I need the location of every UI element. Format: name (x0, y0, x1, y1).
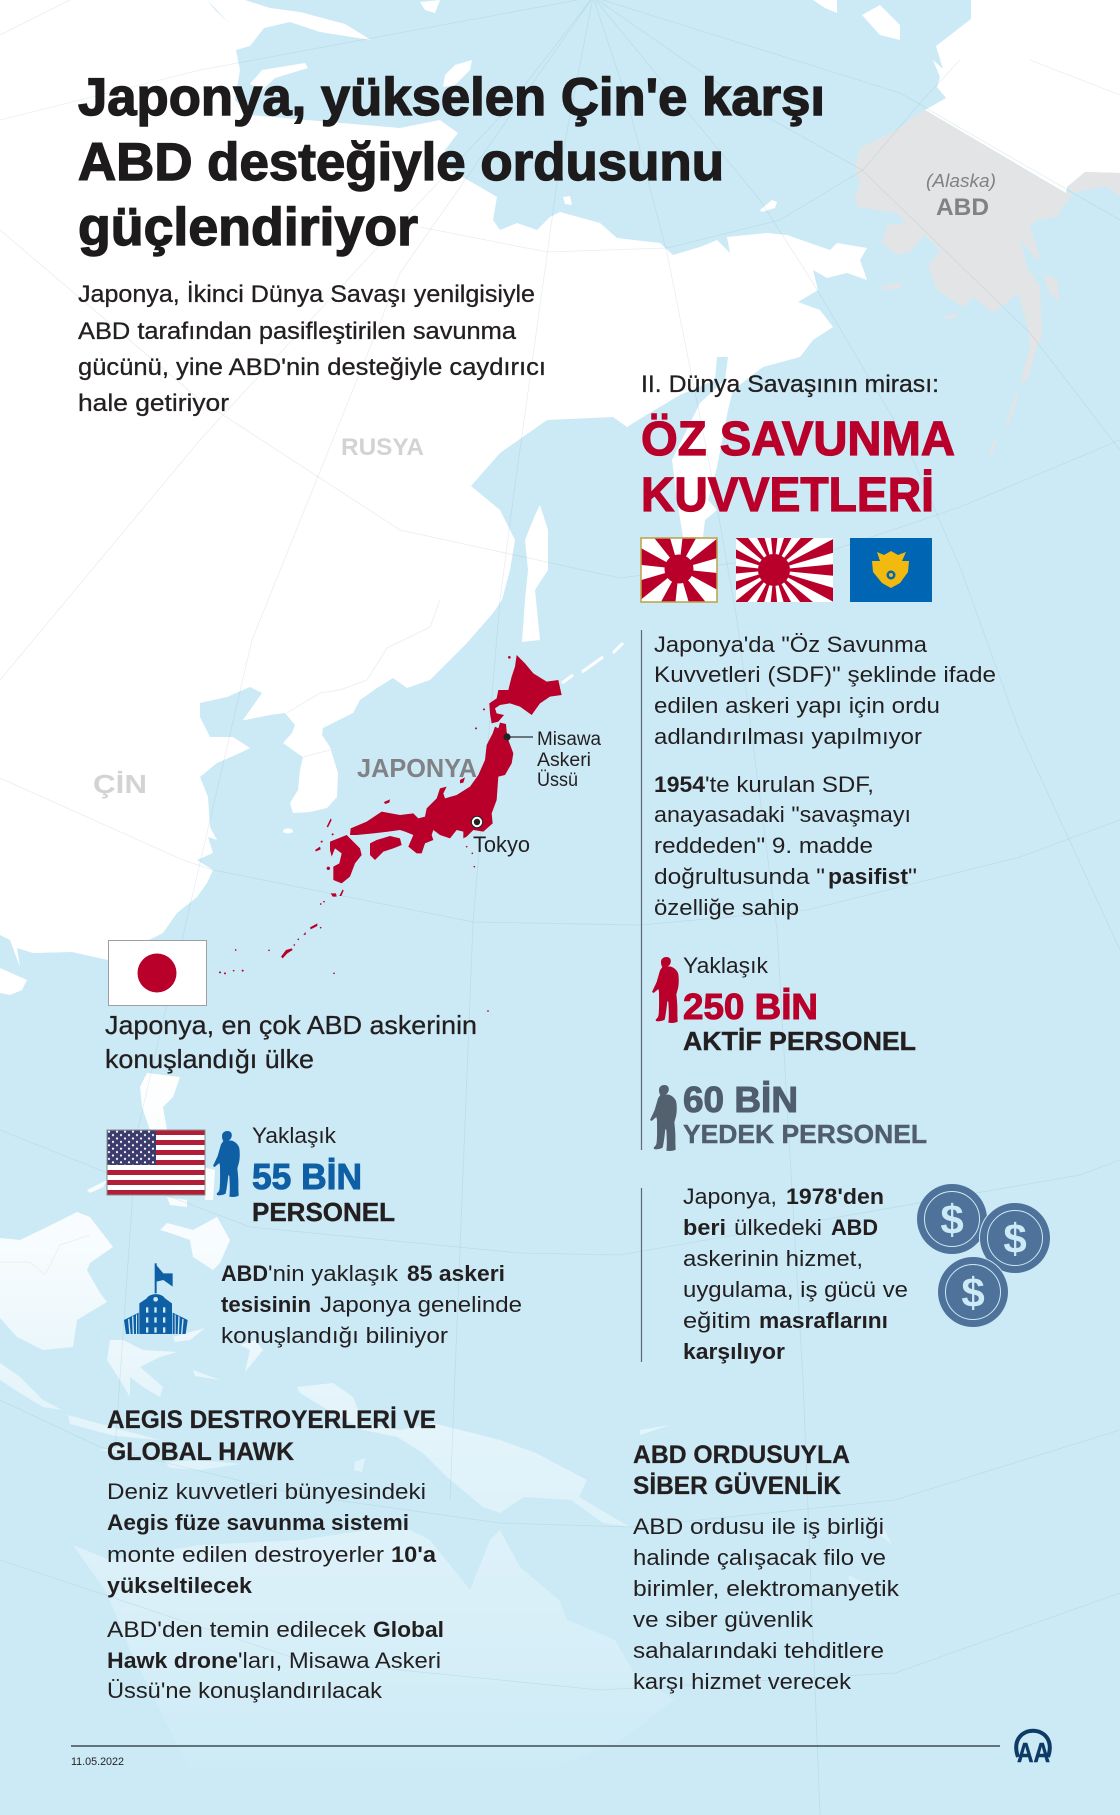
land: Sakhalin (522, 505, 548, 642)
land: Southeast Asia and Australia (0, 1073, 892, 1790)
text: SDF description: anayasadaki "savaşmayı (654, 802, 911, 827)
text: 85 bases (221, 1261, 522, 1348)
body text: Global (373, 1617, 444, 1642)
Shikoku (370, 836, 402, 860)
marker: Misawa (503, 729, 601, 791)
heading: Öz Savunma Kuvvetleri: ÖZ SAVUNMA (641, 413, 955, 466)
text: SDF description: 'te kurulan SDF, (705, 772, 874, 797)
marker: Tokyo (471, 816, 530, 857)
text: SDF description: Kuvvetleri (SDF)" şeklinde ifade (654, 662, 996, 687)
logo: AA (1016, 1731, 1050, 1768)
text: SDF description: reddeden" 9. madde (654, 833, 873, 858)
stat: 55 bin personel: PERSONEL (252, 1197, 395, 1227)
text: Japan pays costs: eğitim (683, 1308, 751, 1333)
footer rule (71, 1745, 1000, 1747)
text: Japan pays costs: 1978'den (786, 1184, 884, 1209)
land: Kurils and small islands (562, 643, 623, 683)
marker: Misawa: Misawa (537, 729, 601, 750)
flag: Japan (108, 940, 206, 1006)
stat: 55 bin personel (252, 1123, 395, 1227)
text: 85 bases: konuşlandığı biliniyor (221, 1323, 449, 1348)
body text: 10'a (391, 1542, 437, 1567)
land: Alaska (855, 110, 1120, 383)
map label: Alaska ABD (926, 171, 996, 221)
body text: karşı hizmet verecek (633, 1669, 852, 1694)
stat: 55 bin personel: 55 BİN (252, 1156, 362, 1197)
marker: Tokyo: Tokyo (473, 832, 530, 857)
text: Japan pays costs: beri (683, 1215, 726, 1240)
text: Japan pays costs: Japonya, (683, 1184, 777, 1209)
date: 11.05.2022 (71, 1756, 124, 1768)
section: Aegis and Global Hawk (107, 1406, 444, 1703)
text: Japan pays costs: ABD (831, 1215, 878, 1240)
text: Japan pays costs: ülkedeki (734, 1215, 822, 1240)
stat: 55 bin personel: Yaklaşık (252, 1123, 337, 1148)
heading (107, 1406, 436, 1466)
land: northern islands (250, 0, 900, 212)
body text: ve siber güvenlik (633, 1607, 814, 1632)
land: Canada (925, 0, 1120, 193)
Hokkaido (489, 655, 562, 723)
text: 85 bases: 'nin yaklaşık (268, 1261, 399, 1286)
icon: red soldier (652, 957, 679, 1023)
Honshu (350, 723, 513, 853)
body text (633, 1514, 900, 1694)
flag: air self defense (850, 538, 932, 602)
stat: 250 bin aktif personel: AKTİF PERSONEL (683, 1026, 916, 1056)
subtitle: Japonya, İkinci Dünya Savaşı yenilgisiyle (78, 281, 535, 308)
marker: Misawa: Üssü (537, 770, 578, 791)
text: SDF description: edilen askeri yapı için ordu (654, 693, 940, 718)
marker: Misawa: Askeri (537, 750, 591, 771)
heading: GLOBAL HAWK (107, 1438, 294, 1466)
stat: 250 bin aktif personel (683, 953, 916, 1056)
title: ABD desteğiyle ordusunu (78, 133, 724, 192)
body text: 'ları, Misawa Askeri (238, 1648, 441, 1673)
body text: Deniz kuvvetleri bünyesindeki (107, 1479, 426, 1504)
flag: USA (107, 1130, 205, 1195)
subtitle: hale getiriyor (78, 390, 229, 417)
body text (107, 1479, 444, 1703)
heading: II. Dünya Savaşının mirası: II. Dünya Savaşının mirası: (641, 371, 939, 398)
heading (633, 1441, 850, 1500)
land: Eurasia (0, 0, 867, 967)
icon: gray soldier (650, 1085, 677, 1151)
icon: dollar coins (917, 1184, 1051, 1328)
map label: Alaska ABD: ABD (936, 194, 989, 221)
borders (0, 600, 440, 1275)
subtitle: gücünü, yine ABD'nin desteğiyle caydırıcı (78, 354, 546, 381)
icon: dollar coins: $ (1003, 1215, 1027, 1262)
icon: dollar coins: $ (961, 1269, 985, 1316)
title (78, 68, 825, 257)
icon: dollar coins: $ (940, 1196, 964, 1243)
heading: SİBER GÜVENLİK (633, 1471, 841, 1500)
text: Japan pays costs: askerinin hizmet, (683, 1246, 863, 1271)
body text: ABD ordusu ile iş birliği (633, 1514, 884, 1539)
rule: cost block (640, 1188, 642, 1362)
Kyushu (330, 835, 362, 883)
rule: SDF column (640, 630, 642, 1150)
heading: AEGIS DESTROYERLERİ VE (107, 1406, 436, 1434)
stat: 250 bin aktif personel: 250 BİN (683, 986, 818, 1027)
text: SDF description: pasifist (828, 864, 909, 889)
caption: most US troops: konuşlandığı ülke (105, 1044, 314, 1074)
body text: yükseltilecek (107, 1573, 252, 1598)
body text: sahalarındaki tehditlere (633, 1638, 884, 1663)
text: SDF description: adlandırılması yapılmıyor (654, 724, 923, 749)
map label: Japonya: JAPONYA (357, 753, 477, 783)
body text: halinde çalışacak filo ve (633, 1545, 886, 1570)
icon: military base (124, 1263, 188, 1334)
text: SDF description (654, 632, 996, 920)
section: cyber security (633, 1441, 900, 1694)
flag: maritime ensign (641, 536, 717, 602)
text: SDF description: Japonya'da "Öz Savunma (654, 632, 928, 657)
stat: 60 bin yedek personel: 60 BİN (683, 1079, 798, 1120)
stat: 60 bin yedek personel (683, 1079, 927, 1149)
text: 85 bases: Japonya genelinde (320, 1292, 522, 1317)
text: Japan pays costs (683, 1184, 908, 1364)
text: SDF description: 1954 (654, 772, 705, 797)
logo: AA: AA (1017, 1737, 1050, 1768)
text: Japan pays costs: karşılıyor (683, 1339, 785, 1364)
stat: 250 bin aktif personel: Yaklaşık (683, 953, 769, 978)
text: SDF description: " (908, 864, 917, 889)
text: 85 bases: tesisinin (221, 1292, 311, 1317)
subtitle (78, 281, 546, 417)
text: SDF description: doğrultusunda " (654, 864, 825, 889)
text: 85 bases: ABD (221, 1261, 268, 1286)
title: güçlendiriyor (78, 198, 418, 257)
body text: Üssü'ne konuşlandırılacak (107, 1678, 383, 1703)
title: Japonya, yükselen Çin'e karşı (78, 68, 825, 127)
map label: Çin: ÇİN (93, 769, 147, 799)
stat: 60 bin yedek personel: YEDEK PERSONEL (683, 1119, 927, 1149)
map label: Rusya: RUSYA (341, 434, 424, 461)
text: 85 bases: 85 askeri (407, 1261, 505, 1286)
subtitle: ABD tarafından pasifleştirilen savunma (78, 318, 516, 345)
land: Hainan (0, 968, 27, 995)
text: Japan pays costs: masraflarını (759, 1308, 888, 1333)
caption: most US troops (105, 1010, 477, 1074)
caption: most US troops: Japonya, en çok ABD askerinin (105, 1010, 477, 1040)
map label: Alaska ABD: (Alaska) (926, 171, 996, 191)
text: Japan pays costs: uygulama, iş gücü ve (683, 1277, 908, 1302)
heading: Öz Savunma Kuvvetleri (641, 413, 955, 522)
body text: Hawk drone (107, 1648, 238, 1673)
body text: Aegis füze savunma sistemi (107, 1510, 409, 1535)
body text: birimler, elektromanyetik (633, 1576, 900, 1601)
heading: Öz Savunma Kuvvetleri: KUVVETLERİ (641, 469, 934, 522)
body text: ABD'den temin edilecek (107, 1617, 367, 1642)
flag: rising sun (736, 538, 833, 602)
text: SDF description: özelliğe sahip (654, 895, 799, 920)
icon: blue soldier (213, 1131, 240, 1197)
map: Japan (219, 655, 562, 1012)
heading: ABD ORDUSUYLA (633, 1441, 850, 1469)
small islands (219, 656, 511, 1012)
body text: monte edilen destroyerler (107, 1542, 385, 1567)
